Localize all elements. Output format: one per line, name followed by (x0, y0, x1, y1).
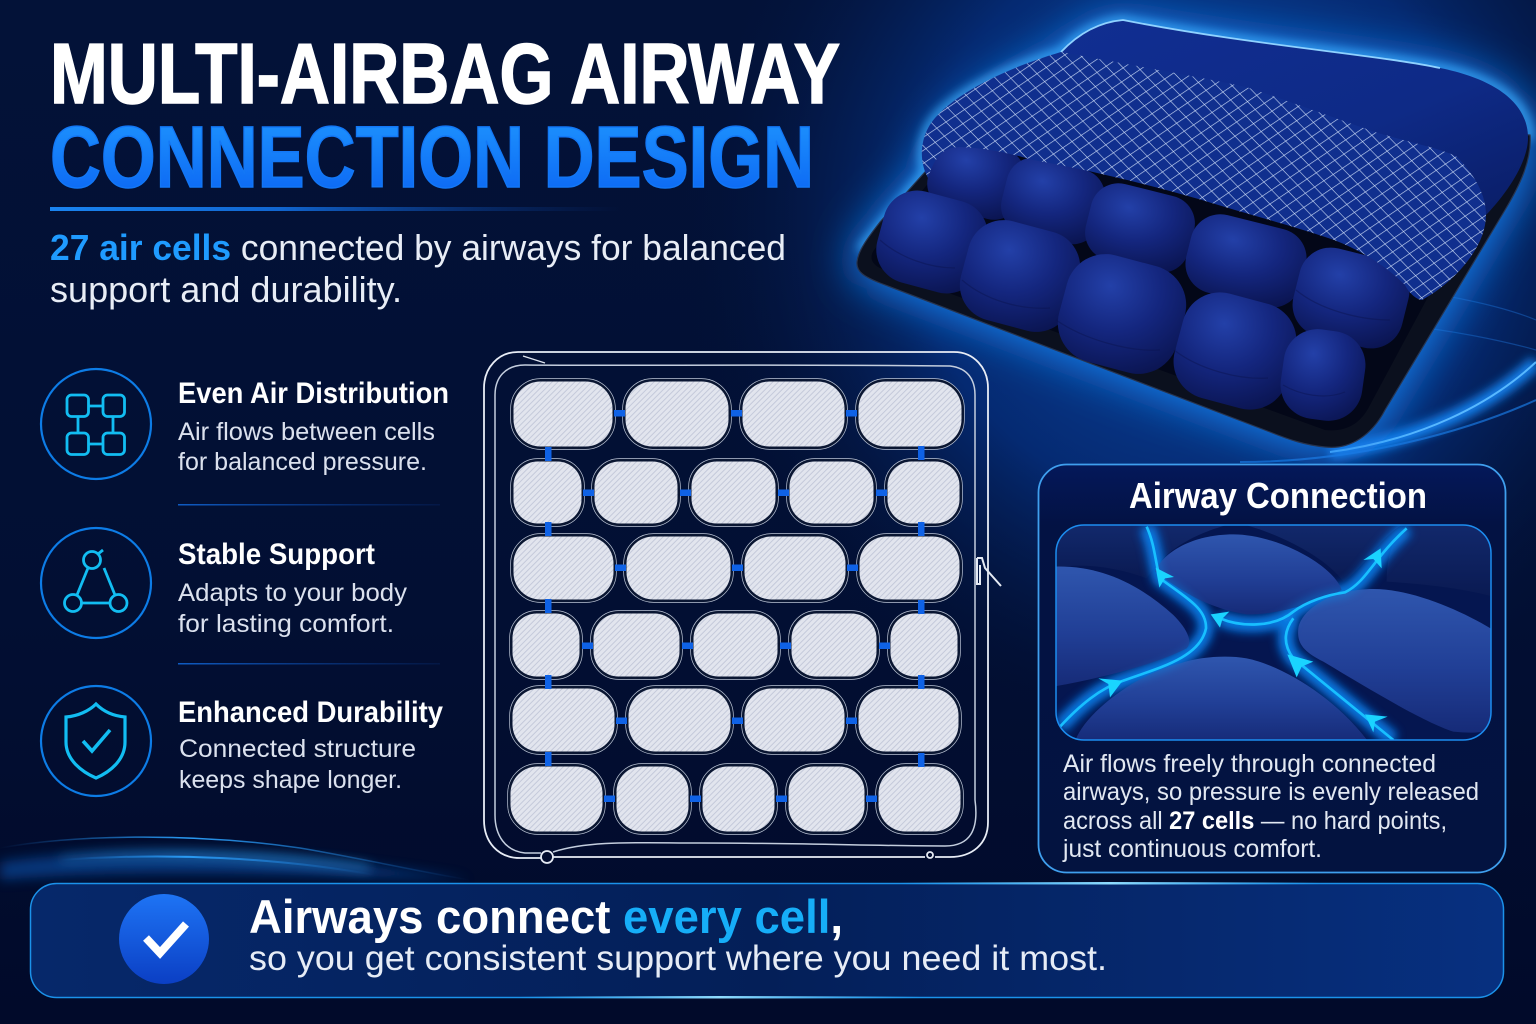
airway close-up illustration (1053, 523, 1493, 742)
title (50, 27, 840, 206)
heading and text: Even Air Distribution (178, 377, 449, 410)
panel: airway connection (1038, 464, 1506, 872)
heading and text: for lasting comfort. (178, 610, 394, 638)
panel heading: Airway Connection (1129, 475, 1427, 516)
banner text: Airways connect every cell, (249, 890, 843, 943)
icon: shield (41, 686, 151, 796)
airflow arrowheads (1098, 548, 1388, 732)
title: CONNECTION DESIGN (50, 109, 814, 206)
tray (857, 120, 1530, 447)
heading and text: Adapts to your body (178, 579, 408, 607)
panel text: airways, so pressure is evenly released (1063, 778, 1479, 806)
cushion bright rim (860, 20, 1530, 250)
27 air cells (510, 382, 962, 832)
velvet cover (1061, 20, 1528, 215)
subtitle (50, 227, 786, 310)
zipper pull (977, 558, 1001, 586)
icon: triangle (41, 528, 151, 638)
icon: check badge (119, 894, 209, 984)
subtitle: 27 air cells connected by airways for balanced (50, 227, 786, 268)
title: MULTI-AIRBAG AIRWAY (50, 27, 840, 122)
airflow lines glow (1060, 527, 1407, 740)
illustration frame (1056, 525, 1491, 740)
cell seams (880, 240, 1390, 396)
heading and text: Connected structure (179, 735, 416, 763)
airflow background glow (1060, 527, 1407, 740)
front row air cells (869, 183, 1370, 425)
title underline rule (50, 207, 620, 211)
mesh cover (922, 52, 1486, 300)
heading and text: for balanced pressure. (178, 448, 427, 476)
cushion outer glow (857, 20, 1530, 447)
banner text (249, 890, 1107, 978)
feature: enhanced durability (41, 686, 443, 796)
valve details (541, 851, 933, 863)
panel text: Air flows freely through connected (1063, 750, 1436, 778)
panel text: just continuous comfort. (1062, 835, 1322, 863)
air cell layout diagram (484, 352, 1001, 863)
heading and text (178, 696, 443, 794)
outer cover outline (484, 352, 988, 858)
banner text: so you get consistent support where you need it most. (249, 939, 1107, 978)
bright pillows (1053, 534, 1493, 742)
heading and text: keeps shape longer. (179, 766, 402, 794)
back row air cells (922, 133, 1416, 355)
panel text: across all 27 cells — no hard points, (1063, 807, 1447, 835)
heading and text (178, 377, 449, 476)
icon: connected cells (41, 369, 151, 479)
airway connectors (545, 410, 924, 802)
heading and text: Enhanced Durability (178, 696, 443, 729)
bottom banner (30, 882, 1504, 998)
heading and text: Air flows between cells (178, 418, 435, 446)
feature: stable support (41, 528, 408, 638)
top rim highlight (1061, 20, 1440, 68)
panel text (1062, 750, 1479, 863)
airflow lines (1060, 527, 1407, 740)
subtitle: support and durability. (50, 269, 402, 310)
heading and text: Stable Support (178, 538, 375, 571)
feature: even air distribution (41, 369, 449, 479)
feature list (41, 369, 449, 796)
dim back pillows (1057, 526, 1490, 580)
heading and text (178, 538, 408, 638)
tray interior (872, 130, 1480, 430)
cushion product image (857, 20, 1530, 447)
